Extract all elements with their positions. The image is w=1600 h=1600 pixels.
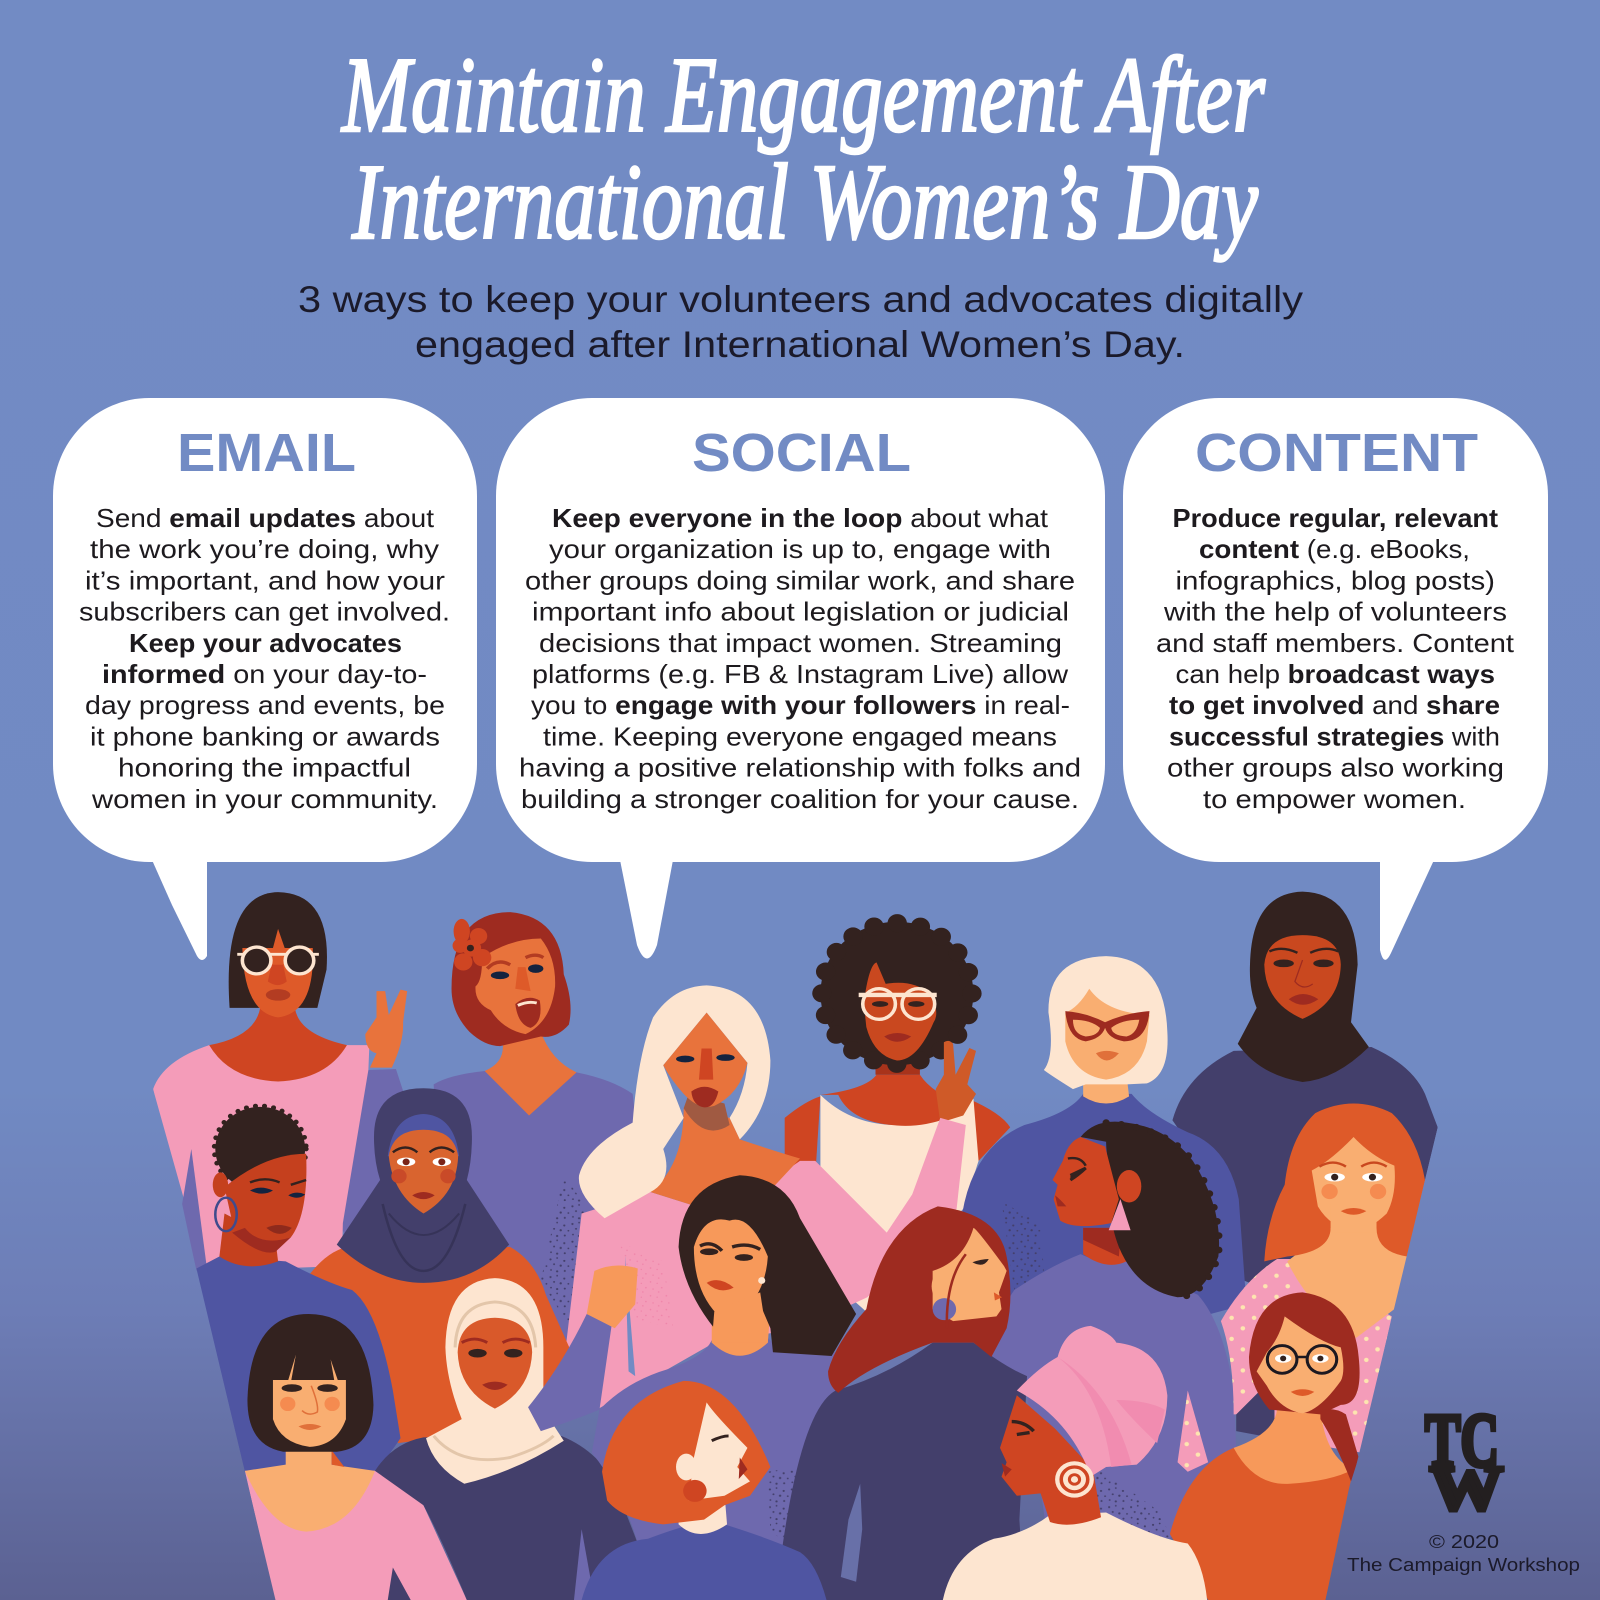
text: social xyxy=(519,503,1081,814)
subtitle: engaged after International Women’s Day. xyxy=(415,324,1185,365)
text: social: having a positive relationship with folks and xyxy=(519,752,1081,782)
figure: woman in cream hijab xyxy=(375,1278,638,1600)
text: content: can help broadcast ways xyxy=(1176,659,1495,689)
heading: email: EMAIL xyxy=(177,423,356,483)
panel: social xyxy=(496,398,1105,958)
subtitle: 3 ways to keep your volunteers and advocates digitally xyxy=(298,279,1304,320)
text: social: time. Keeping everyone engaged means xyxy=(543,722,1057,752)
subtitle xyxy=(298,279,1304,365)
text: content xyxy=(1156,503,1515,814)
text: email: it phone banking or awards xyxy=(90,722,440,752)
text: social: building a stronger coalition for your cause. xyxy=(521,784,1079,814)
figure: woman with red hair shouting xyxy=(434,912,638,1376)
text: email: informed on your day-to- xyxy=(102,659,427,689)
icon: peace hand xyxy=(936,1041,976,1123)
text: content: to empower women. xyxy=(1203,784,1466,814)
text: email: the work you’re doing, why xyxy=(90,534,439,564)
text: email xyxy=(79,503,450,814)
title xyxy=(340,36,1266,262)
title: International Women’s Day xyxy=(351,143,1258,262)
panel: content xyxy=(1123,398,1548,960)
figure: woman with black bob xyxy=(245,1314,467,1600)
figure: woman in profile with ginger hair xyxy=(582,1381,827,1600)
heading: social: SOCIAL xyxy=(692,423,911,483)
text: email: Send email updates about xyxy=(96,503,435,533)
heading: content: CONTENT xyxy=(1195,423,1478,483)
credit: © 2020 xyxy=(1429,1531,1499,1552)
figure: woman with pink turban xyxy=(943,1326,1207,1600)
text: content: with the help of volunteers xyxy=(1163,596,1507,626)
text: content: infographics, blog posts) xyxy=(1176,566,1495,596)
logo xyxy=(1425,1399,1503,1523)
figure: woman with glasses and peace sign xyxy=(153,892,408,1270)
icon: peace hand xyxy=(365,990,407,1068)
text: email: Keep your advocates xyxy=(129,628,402,658)
figure: woman in black hijab xyxy=(1172,892,1438,1282)
text: social: you to engage with your followers in real- xyxy=(531,690,1070,720)
text: email: honoring the impactful xyxy=(118,752,411,782)
figure: woman in navy hijab xyxy=(309,1088,571,1443)
credit: The Campaign Workshop xyxy=(1347,1554,1580,1575)
figure: woman with white bob xyxy=(962,956,1246,1328)
illustration: crowd of women xyxy=(153,892,1438,1600)
figure: woman with white long hair and pink sleeve xyxy=(566,985,966,1410)
text: email: subscribers can get involved. xyxy=(79,596,450,626)
text: content: other groups also working xyxy=(1167,752,1504,782)
text: social: your organization is up to, engage with xyxy=(549,534,1051,564)
logo: TC xyxy=(1425,1399,1499,1483)
text: email: day progress and events, be xyxy=(85,690,445,720)
figure: woman with long black hair and raised fist xyxy=(528,1175,856,1544)
text: content: Produce regular, relevant xyxy=(1172,503,1498,533)
figure: woman with braid and round glasses xyxy=(1170,1292,1360,1600)
figure: woman with short hair and hoop earring xyxy=(196,1106,401,1472)
text: social: important info about legislation or judicial xyxy=(532,596,1069,626)
figure: woman with curly hair and triangle earring xyxy=(991,1122,1236,1539)
icon: flower xyxy=(453,919,491,971)
text: email: it’s important, and how your xyxy=(85,566,445,596)
text: social: platforms (e.g. FB & Instagram Live) allow xyxy=(532,659,1068,689)
title: Maintain Engagement After xyxy=(340,36,1266,155)
figure: woman in profile with red long hair xyxy=(780,1206,1027,1600)
logo: W xyxy=(1430,1455,1503,1523)
icon: earring xyxy=(1055,1461,1094,1498)
figure: ginger woman with polka dot top xyxy=(1178,1103,1425,1472)
text: social: Keep everyone in the loop about what xyxy=(552,503,1049,533)
panel: email xyxy=(53,398,477,960)
credit xyxy=(1347,1531,1580,1575)
text: social: decisions that impact women. Streaming xyxy=(539,628,1062,658)
figure: woman with afro and glasses xyxy=(785,922,1010,1314)
text: email: women in your community. xyxy=(91,784,438,814)
text: social: other groups doing similar work, and share xyxy=(525,566,1075,596)
text: content: successful strategies with xyxy=(1169,722,1500,752)
icon: raised fist xyxy=(587,1265,638,1328)
text: content: to get involved and share xyxy=(1169,690,1500,720)
text: content: content (e.g. eBooks, xyxy=(1199,534,1470,564)
text: content: and staff members. Content xyxy=(1156,628,1515,658)
